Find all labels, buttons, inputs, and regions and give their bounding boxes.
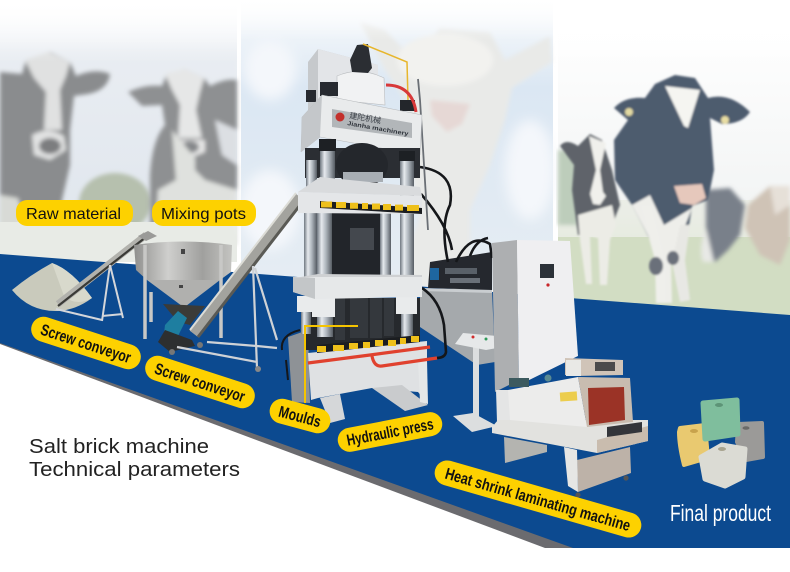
yellow and red pipes xyxy=(363,44,408,100)
grey block xyxy=(737,423,763,460)
label: heat shrink laminating machine: Heat shrink laminating machine xyxy=(443,466,632,535)
red pipes xyxy=(308,347,437,366)
mixer legs xyxy=(145,245,221,339)
label: screw conveyor two xyxy=(142,352,258,412)
label: mixing pots: Mixing pots xyxy=(161,206,246,223)
panel: middle background with goat xyxy=(240,0,555,290)
top box xyxy=(565,358,623,376)
top crown beam xyxy=(301,95,422,155)
label: screw conveyor two: Screw conveyor xyxy=(152,361,247,406)
upper dark assembly xyxy=(305,148,420,178)
stand post xyxy=(473,346,479,421)
tube head xyxy=(138,231,157,241)
lower mould dark zone xyxy=(305,298,420,350)
machine: four-column hydraulic press xyxy=(282,44,437,423)
label: moulds xyxy=(267,396,333,436)
label: hydraulic press xyxy=(336,410,444,454)
tunnel side xyxy=(508,377,587,427)
illustration: goat xyxy=(360,22,552,290)
oil cylinder top xyxy=(337,71,385,105)
base hazard stripe xyxy=(317,335,420,353)
illustration: small left cow xyxy=(560,134,620,285)
machine: control stand xyxy=(453,333,497,432)
illustration: bush behind cows xyxy=(79,173,151,233)
machine: mixing pot xyxy=(134,242,232,352)
lower chrome columns xyxy=(301,310,413,337)
illustration: trees xyxy=(558,150,578,225)
long screw tube xyxy=(194,197,300,334)
stand head xyxy=(455,333,497,350)
moving beam xyxy=(298,177,422,196)
conveyor supports xyxy=(177,266,277,368)
conveyor belt xyxy=(607,422,642,437)
panel: right background with cow herd xyxy=(558,20,790,317)
illustration: grass field xyxy=(558,237,790,317)
label: raw material: Raw material xyxy=(26,206,121,223)
label: screw conveyor one xyxy=(28,313,144,373)
mixer outlet and motor xyxy=(163,304,205,325)
lower dark assembly xyxy=(332,212,384,284)
label: moulds: Moulds xyxy=(277,404,323,431)
valve block xyxy=(428,252,492,290)
right legs xyxy=(577,447,631,492)
support legs xyxy=(56,265,123,321)
moving beam hazard stripe xyxy=(320,201,422,214)
cabinet screen xyxy=(540,264,554,278)
stand base xyxy=(453,413,497,432)
screw tube xyxy=(58,235,146,304)
press base xyxy=(308,341,427,403)
green block xyxy=(703,400,738,439)
machine: control cabinet xyxy=(492,240,578,392)
label: hydraulic press: Hydraulic press xyxy=(345,416,435,450)
nameplate: 建陀机械 xyxy=(349,110,382,126)
hoses xyxy=(420,167,492,358)
black hose left xyxy=(282,330,300,380)
illustration: clouds xyxy=(240,40,555,250)
tunnel front frame xyxy=(578,377,633,427)
product: salt lick blocks xyxy=(679,400,763,486)
illustration: left cow xyxy=(0,52,110,240)
blue floor band xyxy=(0,254,790,548)
red curtain xyxy=(588,387,625,425)
motor xyxy=(350,44,372,73)
label: heat shrink laminating machine xyxy=(432,457,644,541)
illustration: background cows right xyxy=(701,186,790,265)
back plate xyxy=(308,49,378,112)
machine: heat shrink laminating machine xyxy=(492,358,648,498)
middle columns xyxy=(304,212,414,280)
illustration: large front cow xyxy=(614,75,750,303)
title: salt brick machine technical parameters: Technical parameters xyxy=(29,458,240,481)
title: salt brick machine technical parameters xyxy=(29,435,240,481)
lower white collars xyxy=(297,296,417,317)
oil tank xyxy=(420,288,495,365)
title: salt brick machine technical parameters: Salt brick machine xyxy=(29,435,209,458)
label: screw conveyor one: Screw conveyor xyxy=(38,322,133,367)
machine: second screw conveyor xyxy=(169,193,304,372)
illustration: right cow xyxy=(128,69,237,245)
label: mixing pots xyxy=(152,200,256,226)
rear panel xyxy=(496,390,511,423)
rollers and gauges xyxy=(509,378,529,387)
body left side xyxy=(288,330,310,403)
machine bed xyxy=(492,420,648,453)
nameplate xyxy=(332,109,412,138)
yellow block xyxy=(679,425,708,465)
yellow pointer for moulds xyxy=(305,326,358,403)
lower crossbeam xyxy=(293,277,422,299)
dark mould rods xyxy=(335,298,394,340)
nameplate: Jianha machinery xyxy=(347,121,410,138)
panel: left background with two cows xyxy=(0,0,237,262)
machine: hydraulic tank and valve block xyxy=(420,167,495,365)
white block xyxy=(701,445,745,486)
label: raw material xyxy=(16,200,133,226)
machine: first screw conveyor xyxy=(56,231,157,321)
illustration: raw material pile xyxy=(12,263,92,311)
mixer cone xyxy=(147,280,220,306)
illustration: faded grass xyxy=(0,222,237,262)
left leg xyxy=(504,437,547,463)
upper columns xyxy=(306,149,414,196)
mixer drum xyxy=(134,242,232,280)
